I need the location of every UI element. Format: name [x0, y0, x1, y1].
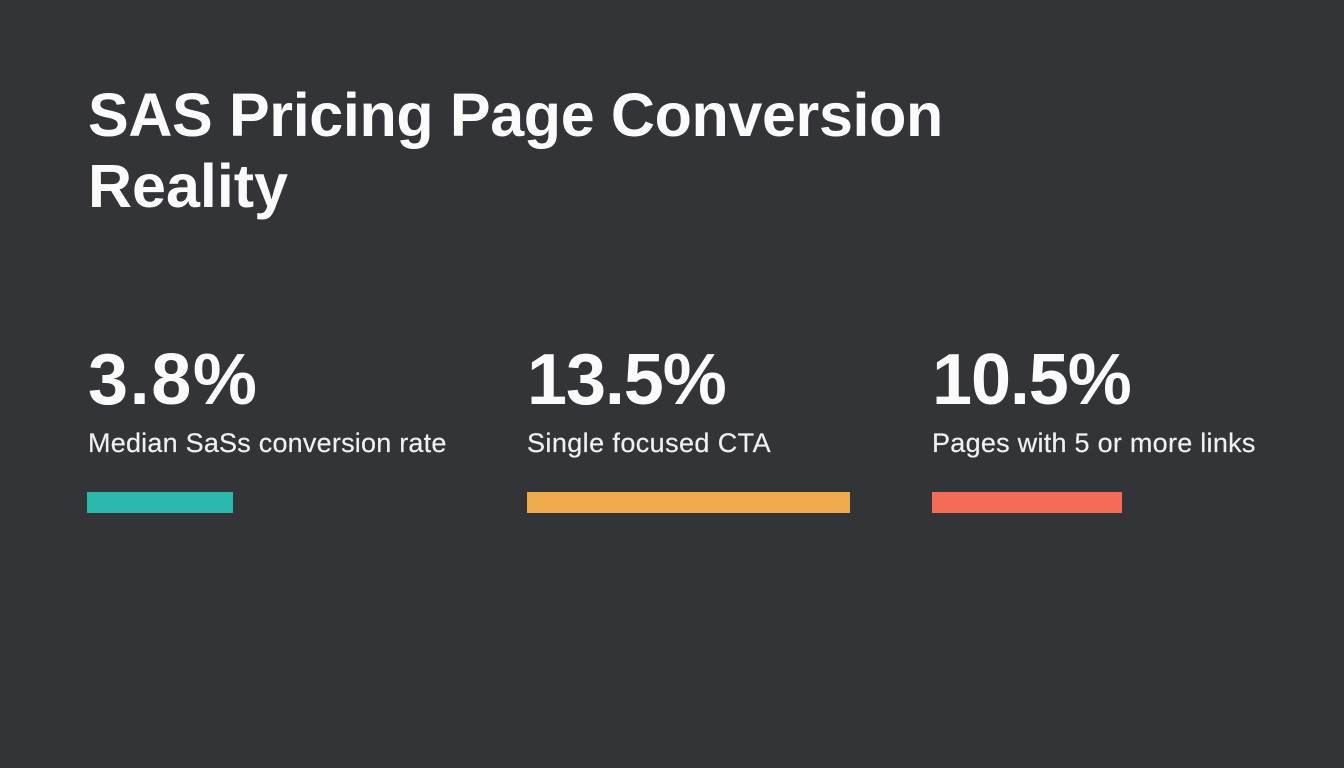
label: median: Median SaSs conversion rate [88, 428, 447, 458]
value: 13.5%: 13.5% [527, 340, 726, 420]
panel: pages with 5 or more links [932, 340, 1256, 513]
panel: single focused CTA [527, 340, 850, 513]
panel: median SaaS conversion rate [87, 340, 447, 513]
bar: coral [932, 492, 1122, 513]
title: SAS Pricing Page Conversion [88, 81, 943, 149]
label: pages: Pages with 5 or more links [932, 428, 1256, 458]
title: Reality [88, 152, 288, 220]
title [88, 81, 943, 220]
value: 3.8%: 3.8% [88, 340, 259, 420]
bar: amber [527, 492, 850, 513]
value: 10.5%: 10.5% [932, 340, 1131, 420]
label: single CTA: Single focused CTA [527, 428, 771, 458]
bar: teal [87, 492, 233, 513]
